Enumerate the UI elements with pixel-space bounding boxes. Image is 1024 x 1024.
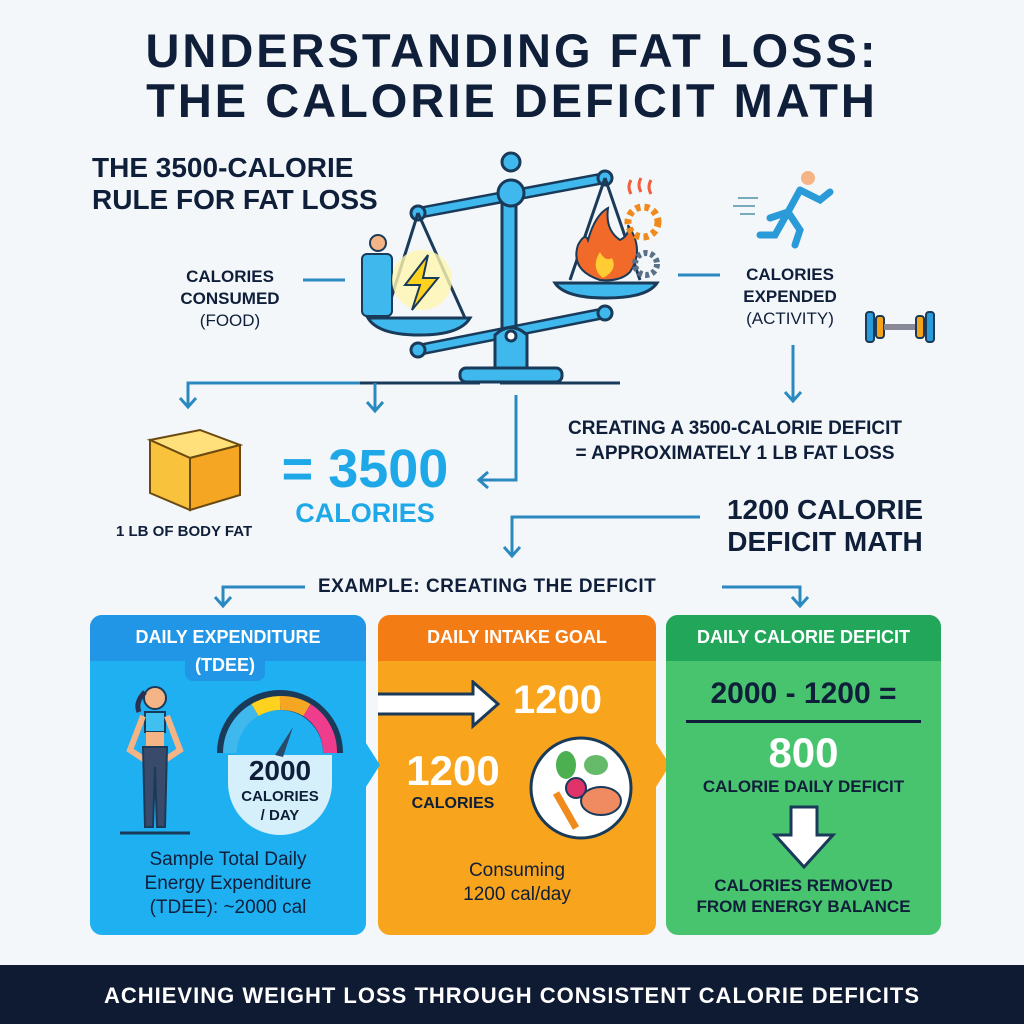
label: calories consumed: CALORIES <box>186 267 274 286</box>
label: calories consumed <box>180 267 280 330</box>
header: DAILY CALORIE DEFICIT <box>697 627 910 647</box>
caption: CALORIES REMOVED <box>714 876 893 895</box>
fat cube <box>150 430 240 458</box>
footer banner: ACHIEVING WEIGHT LOSS THROUGH CONSISTENT CALORIE DEFICITS <box>104 983 920 1008</box>
title: UNDERSTANDING FAT LOSS: <box>145 24 879 77</box>
deficit statement: CREATING A 3500-CALORIE DEFICIT <box>568 418 902 439</box>
down arrow <box>772 806 836 870</box>
header: DAILY INTAKE GOAL <box>427 627 607 647</box>
caption: FROM ENERGY BALANCE <box>696 897 911 916</box>
fire <box>576 208 637 280</box>
heading: 1200 deficit math <box>727 494 923 557</box>
woman figure <box>120 686 190 834</box>
caption <box>463 860 571 905</box>
gauge <box>217 690 343 835</box>
header <box>378 615 656 661</box>
1200 big: 1200 <box>513 678 602 722</box>
footer banner <box>0 965 1024 1024</box>
gauge text: 2000 <box>249 755 311 786</box>
plate icon <box>530 736 632 840</box>
deficit statement <box>568 418 902 464</box>
runner <box>801 171 815 185</box>
label: calories expended: EXPENDED <box>743 287 837 306</box>
gauge text: / DAY <box>261 807 299 824</box>
gauge text: CALORIES <box>241 788 319 805</box>
3500 calories <box>282 439 448 528</box>
panel: daily expenditure: (TDEE) <box>195 655 255 675</box>
caption: Energy Expenditure <box>145 873 311 894</box>
panel: daily calorie deficit <box>666 615 941 935</box>
caption: 1200 cal/day <box>463 884 571 905</box>
deficit statement: = APPROXIMATELY 1 LB FAT LOSS <box>575 443 894 464</box>
dumbbell <box>866 312 934 342</box>
arrow <box>378 680 500 730</box>
subtitle: 3500 rule: RULE FOR FAT LOSS <box>92 184 378 215</box>
caption: Sample Total Daily <box>149 849 306 870</box>
label: calories expended: CALORIES <box>746 265 834 284</box>
connector arrows <box>180 345 808 606</box>
title <box>145 24 879 127</box>
caption <box>145 849 311 918</box>
label: 1 lb body fat: 1 LB OF BODY FAT <box>116 523 252 540</box>
caption: Consuming <box>469 860 565 881</box>
1200 calories: 1200 <box>406 747 500 794</box>
gauge text <box>241 755 319 824</box>
person on left pan <box>370 235 386 251</box>
caption <box>696 876 911 916</box>
result 800: 800 <box>768 729 839 776</box>
header <box>90 615 366 661</box>
subtitle: 3500 rule <box>92 152 378 215</box>
panel: daily expenditure <box>90 615 366 935</box>
panel: daily calorie deficit: CALORIE DAILY DEFICIT <box>703 777 904 796</box>
panel: daily intake goal <box>378 615 656 935</box>
heading: 1200 deficit math: 1200 CALORIE <box>727 494 923 525</box>
label: calories consumed: (FOOD) <box>200 311 260 330</box>
chevrons between panels <box>366 743 380 787</box>
label: calories expended: (ACTIVITY) <box>746 309 834 328</box>
subtitle: 3500 rule: THE 3500-CALORIE <box>92 152 353 183</box>
example heading: EXAMPLE: CREATING THE DEFICIT <box>318 576 656 597</box>
heading: 1200 deficit math: DEFICIT MATH <box>727 526 923 557</box>
3500 calories: = 3500 <box>282 439 448 499</box>
caption: (TDEE): ~2000 cal <box>150 897 306 918</box>
equation: 2000 - 1200 = <box>710 677 896 710</box>
header: DAILY EXPENDITURE <box>135 627 321 647</box>
title: THE CALORIE DEFICIT MATH <box>146 74 878 127</box>
label: calories consumed: CONSUMED <box>180 289 280 308</box>
3500 calories: CALORIES <box>295 498 435 528</box>
label: calories expended <box>743 265 837 328</box>
header <box>666 615 941 661</box>
1200 calories: CALORIES <box>412 795 494 812</box>
